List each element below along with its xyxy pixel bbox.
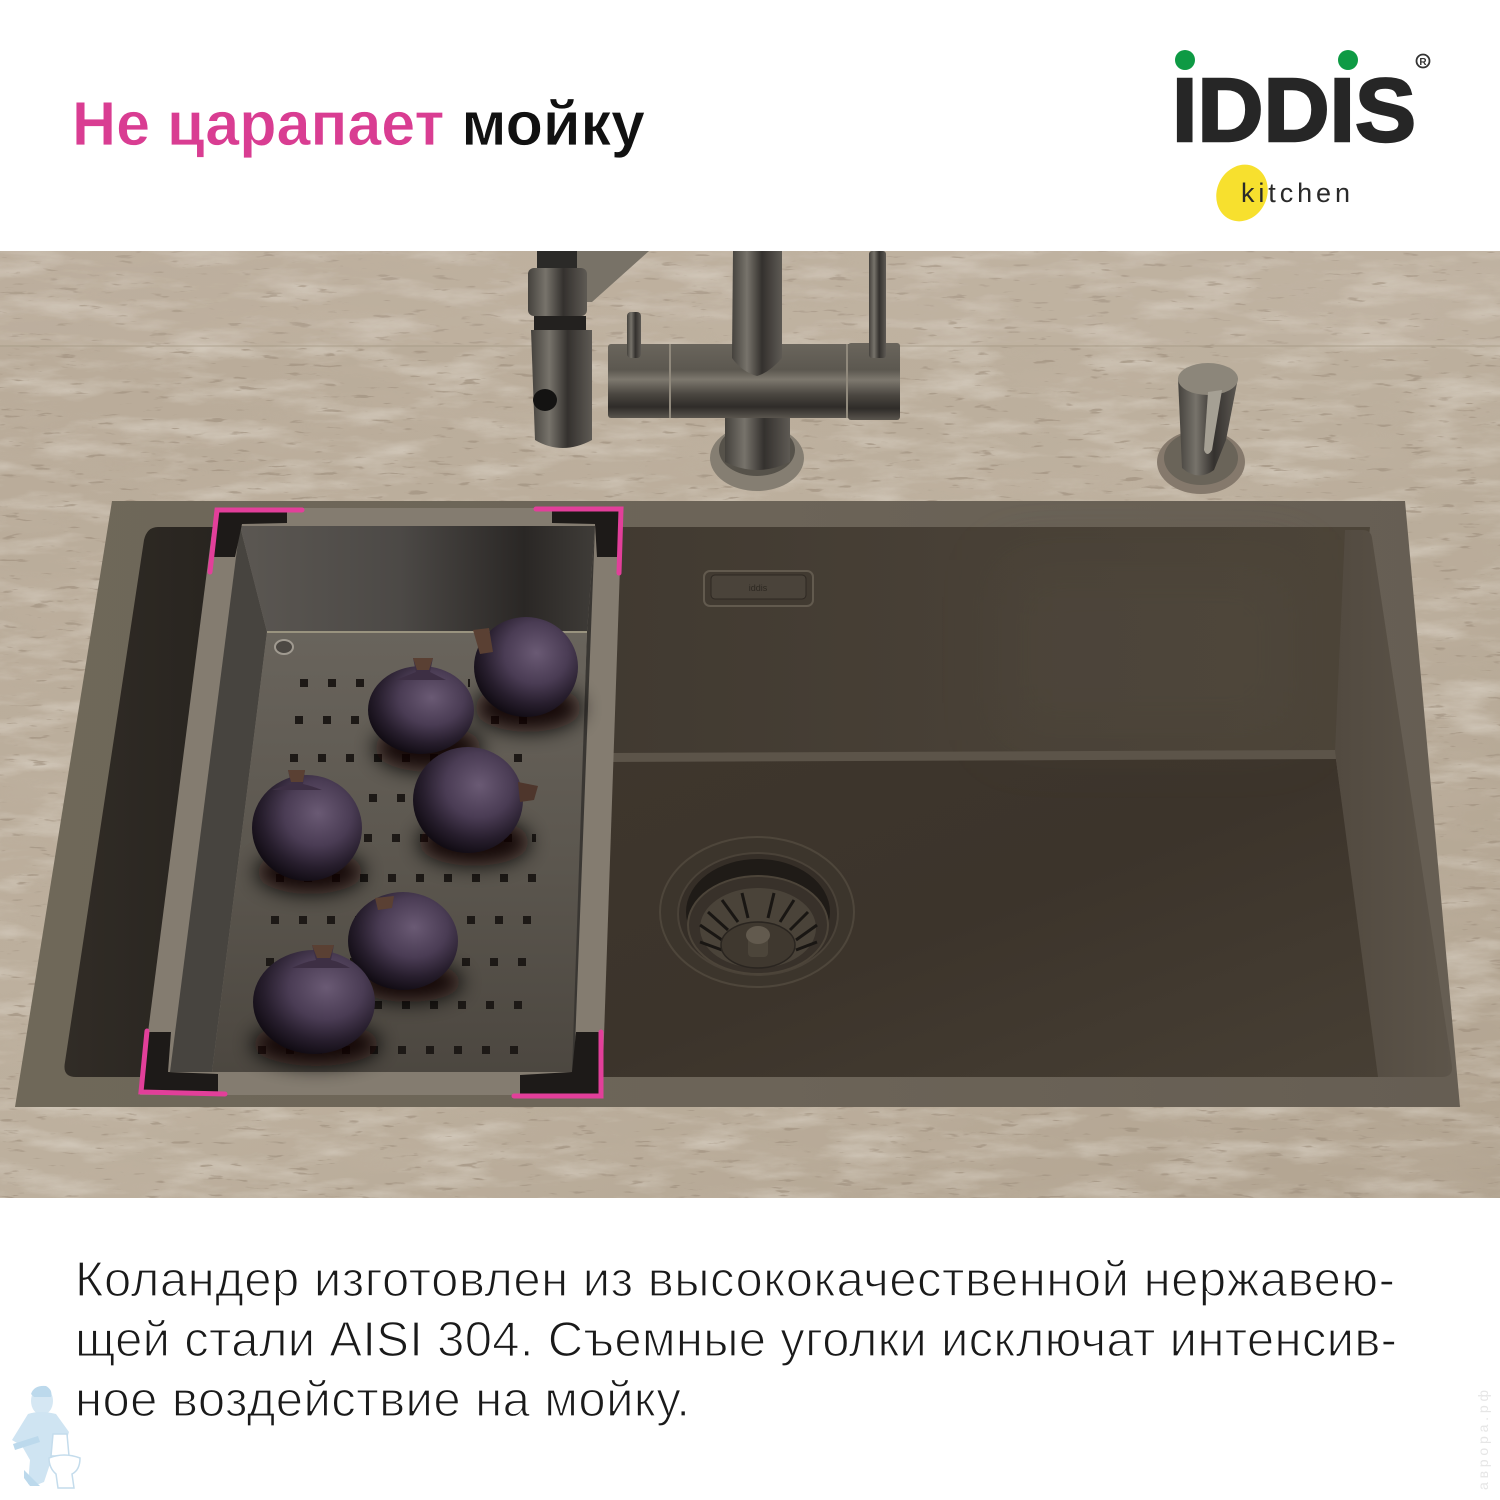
colander back wall (240, 526, 595, 632)
sink main basin (560, 527, 1452, 1077)
colander rim (140, 508, 622, 1095)
description text: ное воздействие на мойку. (75, 1373, 690, 1427)
sink rim (15, 501, 1460, 1107)
fig 5 (348, 892, 458, 990)
photo: kitchen sink on stone countertop (0, 251, 1500, 1198)
logo: iddis kitchen (1172, 50, 1430, 230)
fig shadows (252, 684, 582, 1066)
overflow cover: iddis (749, 583, 768, 593)
colander screw (275, 640, 293, 654)
sink left basin (64, 527, 212, 1077)
logo yellow spot (1207, 156, 1277, 230)
watermark: plumber with toilet (12, 1386, 80, 1488)
registered mark: R (1419, 57, 1427, 68)
basin floor (560, 752, 1380, 1077)
fig 6 (253, 945, 375, 1054)
watermark: vertical site text: аврора.рф (1475, 1390, 1491, 1490)
right wall (1335, 530, 1452, 1077)
fig 1 (473, 617, 578, 717)
faucet post (725, 418, 790, 470)
thin tube (869, 251, 886, 358)
fig 4 (252, 770, 362, 881)
pink corner highlights (141, 509, 621, 1096)
fig 2 (368, 658, 474, 754)
colander (140, 508, 622, 1096)
floor edge (610, 750, 1336, 762)
title: Не царапает мойку (72, 90, 646, 159)
main spout (732, 251, 782, 376)
description text (75, 1253, 1397, 1427)
logo wordmark: IDDIS (1172, 61, 1416, 161)
colander floor (212, 632, 587, 1072)
pull-out spray head (528, 251, 592, 448)
stone countertop (0, 251, 1500, 1198)
perforation rows (258, 683, 536, 1050)
black corner protectors (142, 508, 620, 1095)
drain strainer (660, 837, 854, 987)
fig 3 (413, 747, 538, 853)
overflow cover (704, 571, 813, 606)
faucet body (608, 344, 854, 418)
colander left wall (170, 526, 267, 1072)
small lever (627, 312, 641, 358)
soap dispenser (1157, 363, 1245, 494)
back wall (560, 527, 1370, 755)
logo kitchen text: kitchen (1241, 178, 1350, 208)
registered mark (1416, 54, 1430, 68)
description text: щей стали AISI 304. Съемные уголки исключат интенсив- (75, 1313, 1397, 1367)
faucet (528, 251, 900, 491)
faucet base (710, 434, 804, 491)
colander right wall (570, 526, 595, 1072)
description text: Коландер изготовлен из высококачественной нержавею- (75, 1253, 1395, 1307)
logo green dots (1175, 50, 1358, 70)
pull-out spray arm (575, 251, 649, 302)
